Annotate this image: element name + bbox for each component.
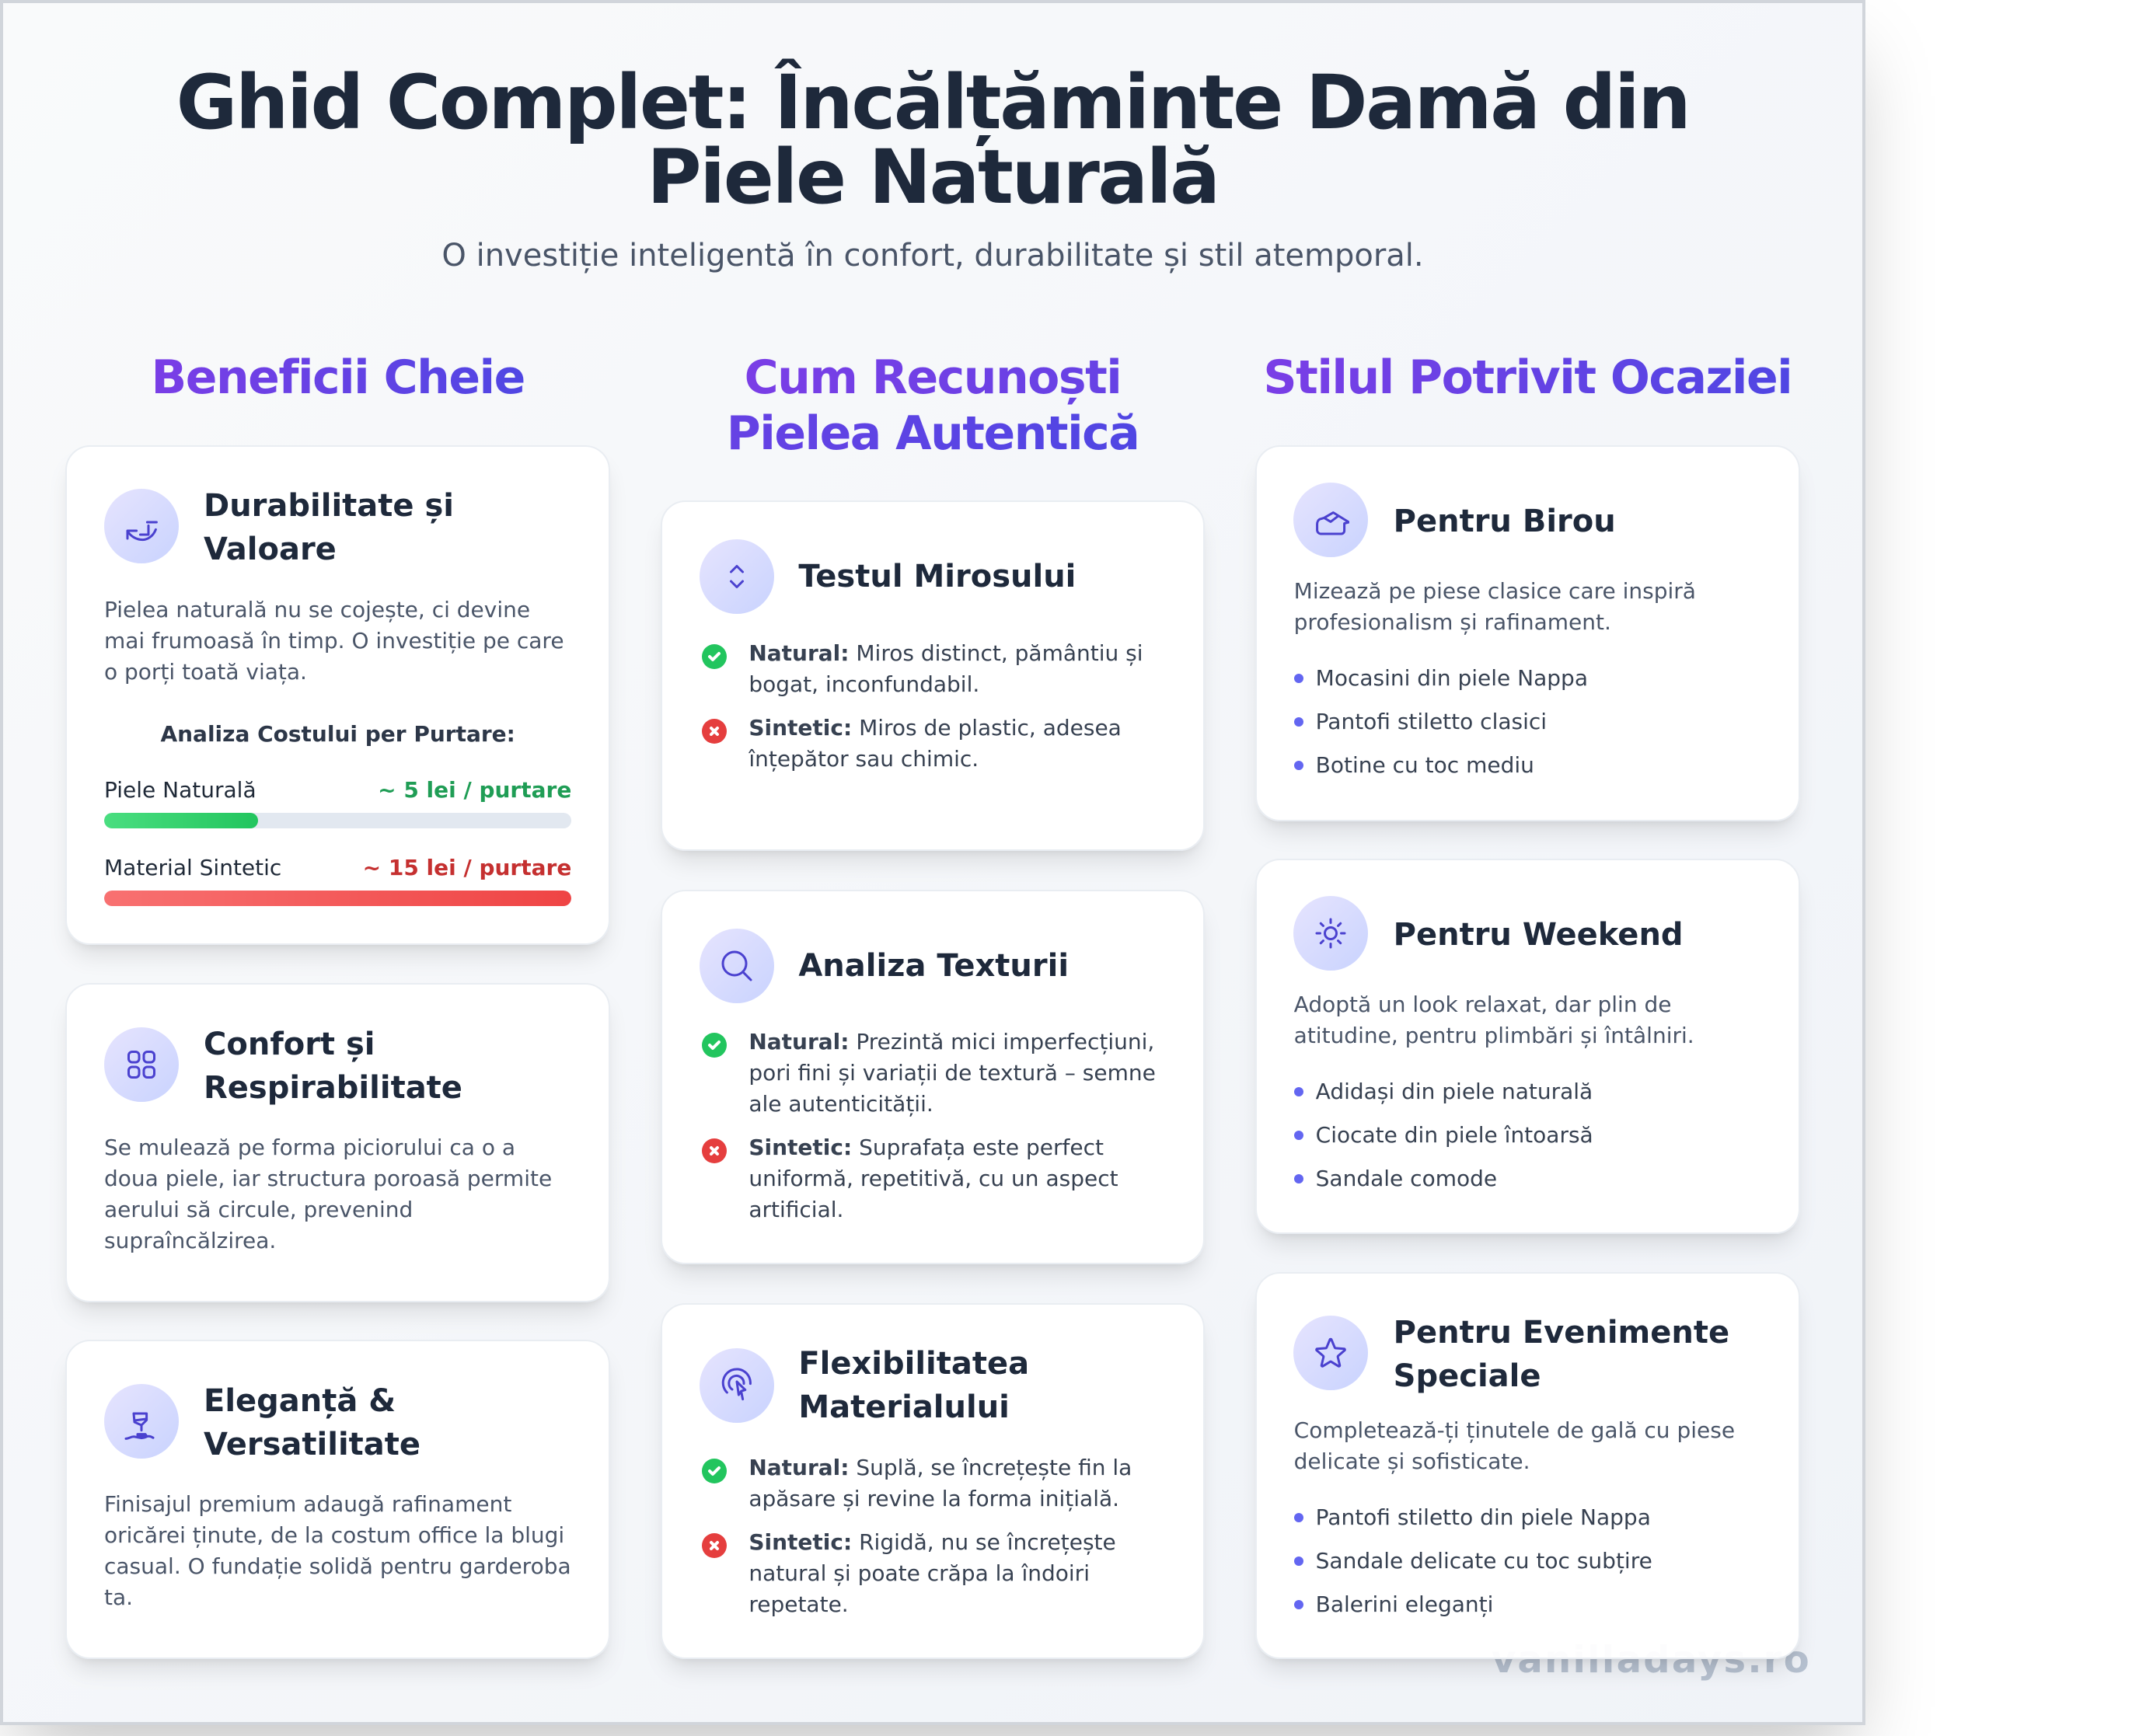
- description: aerului să circule, prevenind: [104, 1197, 413, 1222]
- cost row: natural: [104, 777, 571, 803]
- natural item: [702, 640, 1143, 697]
- card title: Speciale: [1394, 1358, 1541, 1394]
- natural item: bogat, inconfundabil.: [748, 671, 979, 697]
- natural item: Natural: Prezintă mici imperfecțiuni,: [748, 1029, 1154, 1054]
- card title: [204, 1383, 420, 1462]
- card title: [798, 1346, 1029, 1425]
- panel: Durabilitate și Valoare: [65, 445, 610, 945]
- description: oricărei ținute, de la costum office la blugi: [104, 1522, 564, 1548]
- cost row: synthetic: [104, 855, 571, 880]
- description: casual. O fundație solidă pentru garderoba: [104, 1553, 571, 1579]
- cost heading: Analiza Costului per Purtare:: [160, 721, 515, 747]
- shoe list: Sandale delicate cu toc subțire: [1316, 1548, 1652, 1574]
- card title: Analiza Texturii: [798, 948, 1069, 984]
- card title: Flexibilitatea: [798, 1346, 1029, 1382]
- natural item: ale autenticității.: [748, 1091, 933, 1117]
- icon: star: [1293, 1316, 1368, 1390]
- description: profesionalism și rafinament.: [1294, 609, 1611, 635]
- description: [104, 597, 564, 685]
- heading: Beneficii Cheie: Beneficii Cheie: [152, 350, 525, 405]
- description: [104, 1491, 571, 1610]
- card title: [204, 1026, 462, 1105]
- synthetic item: înțepător sau chimic.: [748, 746, 979, 772]
- cost row: natural: ~ 5 lei / purtare: [378, 777, 571, 803]
- icon: glass on hand: [104, 1384, 179, 1459]
- panel: Confort și Respirabilitate: [65, 982, 610, 1302]
- cost row: natural: Piele Naturală: [104, 777, 256, 803]
- description: Completează-ți ținutele de gală cu piese: [1294, 1417, 1735, 1443]
- shoe list: Ciocate din piele întoarsă: [1316, 1122, 1593, 1148]
- comparison list: [702, 640, 1143, 772]
- panel: Eleganță & Versatilitate: [65, 1340, 610, 1659]
- description: Mizează pe piese clasice care inspiră: [1294, 578, 1696, 604]
- description: Finisajul premium adaugă rafinament: [104, 1491, 511, 1517]
- description: [1294, 578, 1696, 635]
- comparison list: [702, 1455, 1132, 1617]
- panel: Testul Mirosului: [661, 500, 1205, 851]
- synthetic item: [702, 715, 1122, 772]
- description: Se mulează pe forma piciorului ca o a: [104, 1135, 515, 1159]
- description: atitudine, pentru plimbări și întâlniri.: [1294, 1023, 1694, 1048]
- shoe list: [1294, 1079, 1593, 1191]
- panel: Pentru Evenimente Speciale: [1255, 1272, 1800, 1659]
- card title: [204, 488, 454, 567]
- synthetic item: artificial.: [748, 1197, 843, 1222]
- panel: Pentru Birou: [1255, 445, 1800, 821]
- panel: Pentru Weekend: [1255, 859, 1800, 1234]
- card title: Testul Mirosului: [798, 559, 1076, 594]
- card title: Eleganță &: [204, 1383, 396, 1419]
- synthetic item: uniformă, repetitivă, cu un aspect: [748, 1166, 1118, 1191]
- icon: sun: [1293, 896, 1368, 971]
- synthetic item: [702, 1135, 1118, 1222]
- natural item: [702, 1455, 1132, 1511]
- heading: Stilul Potrivit Ocaziei: Stilul Potrivit Ocaziei: [1263, 350, 1792, 405]
- shoe list: [1294, 665, 1588, 778]
- heading: Cum Recunoști Pielea Autentică: [727, 350, 1139, 461]
- bar: natural 33%: [104, 813, 571, 828]
- synthetic item: natural și poate crăpa la îndoiri: [748, 1560, 1090, 1586]
- synthetic item: Sintetic: Suprafața este perfect: [748, 1135, 1104, 1160]
- natural item: [702, 1029, 1156, 1117]
- shoe list: Pantofi stiletto din piele Nappa: [1316, 1504, 1651, 1530]
- shoe list: Sandale comode: [1316, 1166, 1497, 1191]
- description: mai frumoasă în timp. O investiție pe care: [104, 628, 564, 654]
- card title: Materialului: [798, 1389, 1010, 1425]
- description: delicate și sofisticate.: [1294, 1448, 1530, 1474]
- shoe list: Pantofi stiletto clasici: [1316, 709, 1547, 734]
- subtitle: O investiție inteligentă în confort, durabilitate și stil atemporal.: [441, 238, 1424, 274]
- bar: synthetic 100%: [104, 891, 571, 906]
- description: [104, 1135, 552, 1253]
- synthetic item: [702, 1529, 1116, 1617]
- card title: Pentru Evenimente: [1394, 1315, 1729, 1351]
- description: [1293, 992, 1694, 1048]
- description: o porți toată viața.: [104, 659, 307, 685]
- comparison list: [702, 1029, 1156, 1222]
- icon: squares: [104, 1027, 179, 1102]
- icon: durability arrow: [104, 489, 179, 563]
- icon: chevrons: [700, 539, 774, 614]
- title: Ghid Complet: Încălțăminte Damă din: [176, 59, 1689, 146]
- description: ta.: [104, 1584, 133, 1610]
- natural item: pori fini și variații de textură – semne: [748, 1060, 1156, 1086]
- title: Piele Naturală: [647, 134, 1219, 221]
- card title: Versatilitate: [204, 1427, 420, 1462]
- natural item: Natural: Suplă, se încrețește fin la: [748, 1455, 1132, 1480]
- natural item: apăsare și revine la forma inițială.: [748, 1486, 1119, 1511]
- card title: Confort și: [204, 1026, 375, 1061]
- shoe list: Mocasini din piele Nappa: [1316, 665, 1588, 691]
- shoe list: Balerini eleganți: [1316, 1591, 1493, 1617]
- cost row: synthetic: Material Sintetic: [104, 855, 281, 880]
- synthetic item: Sintetic: Rigidă, nu se încrețește: [748, 1529, 1116, 1555]
- cost row: synthetic: ~ 15 lei / purtare: [363, 855, 571, 880]
- shoe list: Adidași din piele naturală: [1316, 1079, 1593, 1104]
- card title: [1394, 1315, 1729, 1394]
- panel: Flexibilitatea Materialului: [661, 1303, 1205, 1659]
- shoe list: [1294, 1504, 1652, 1617]
- description: [1294, 1417, 1735, 1474]
- card title: Respirabilitate: [204, 1069, 462, 1105]
- synthetic item: Sintetic: Miros de plastic, adesea: [748, 715, 1122, 741]
- shoe list: Botine cu toc mediu: [1316, 752, 1534, 778]
- description: Adoptă un look relaxat, dar plin de: [1294, 992, 1671, 1017]
- description: doua piele, iar structura poroasă permite: [104, 1166, 552, 1190]
- icon: cursor with arcs: [700, 1348, 774, 1423]
- synthetic item: repetate.: [748, 1591, 849, 1617]
- icon: magnifier: [700, 929, 774, 1003]
- title: [176, 59, 1689, 221]
- card title: Valoare: [204, 532, 337, 567]
- card title: Durabilitate și: [204, 488, 454, 524]
- card title: Pentru Weekend: [1394, 917, 1684, 953]
- panel: Analiza Texturii: [661, 890, 1205, 1264]
- description: Pielea naturală nu se cojește, ci devine: [104, 597, 530, 622]
- heading: Cum Recunoști Pielea Autentică: Cum Recunoști: [745, 350, 1121, 405]
- card title: Pentru Birou: [1394, 504, 1616, 539]
- icon: office box: [1293, 483, 1368, 557]
- description: supraîncălzirea.: [104, 1228, 276, 1253]
- natural item: Natural: Miros distinct, pământiu și: [748, 640, 1143, 666]
- watermark: vanilladays.ro: [1492, 1638, 1811, 1682]
- heading: Cum Recunoști Pielea Autentică: Pielea Autentică: [727, 406, 1139, 461]
